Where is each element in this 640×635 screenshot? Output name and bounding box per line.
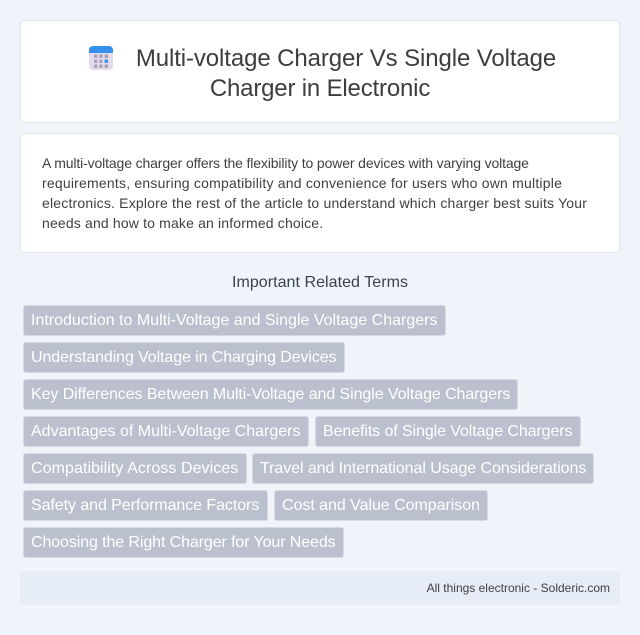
tag: Benefits of Single Voltage Chargers — [323, 423, 572, 440]
tag: Understanding Voltage in Charging Devices — [31, 349, 336, 366]
tag — [23, 379, 518, 410]
tag: Key Differences Between Multi-Voltage and Single Voltage Chargers — [31, 386, 510, 403]
tag: Advantages of Multi-Voltage Chargers — [31, 423, 300, 440]
tag — [23, 342, 345, 373]
intro panel — [20, 133, 620, 253]
tag — [252, 453, 594, 484]
tag — [23, 490, 268, 521]
tag: Choosing the Right Charger for Your Needs — [31, 534, 336, 551]
tag — [23, 416, 309, 447]
title: Multi-voltage Charger Vs Single Voltage — [136, 45, 556, 72]
tag — [315, 416, 581, 447]
tag: Compatibility Across Devices — [31, 460, 238, 477]
tag: Travel and International Usage Considerations — [260, 460, 586, 477]
icon: calendar — [89, 46, 113, 70]
tag — [274, 490, 488, 521]
tag — [23, 305, 446, 336]
intro text: electronics. Explore the rest of the article to understand which charger best suits Your — [42, 195, 587, 211]
intro text: needs and how to make an informed choice. — [42, 215, 323, 231]
title — [136, 45, 556, 102]
intro text: A multi-voltage charger offers the flexibility to power devices with varying voltage — [42, 155, 529, 171]
tag: Cost and Value Comparison — [282, 497, 480, 514]
title: Charger in Electronic — [210, 75, 430, 102]
tag — [23, 527, 344, 558]
related terms heading: Important Related Terms — [232, 274, 408, 291]
tags list — [23, 305, 594, 558]
tag: Introduction to Multi-Voltage and Single Voltage Chargers — [31, 312, 437, 329]
tag: Safety and Performance Factors — [31, 497, 259, 514]
tag — [23, 453, 247, 484]
footer text: All things electronic - Solderic.com — [427, 581, 610, 595]
intro text — [42, 155, 587, 231]
intro text: requirements, ensuring compatibility and convenience for users who own multiple — [42, 175, 562, 191]
footer bar — [20, 571, 620, 605]
header panel — [20, 20, 620, 123]
